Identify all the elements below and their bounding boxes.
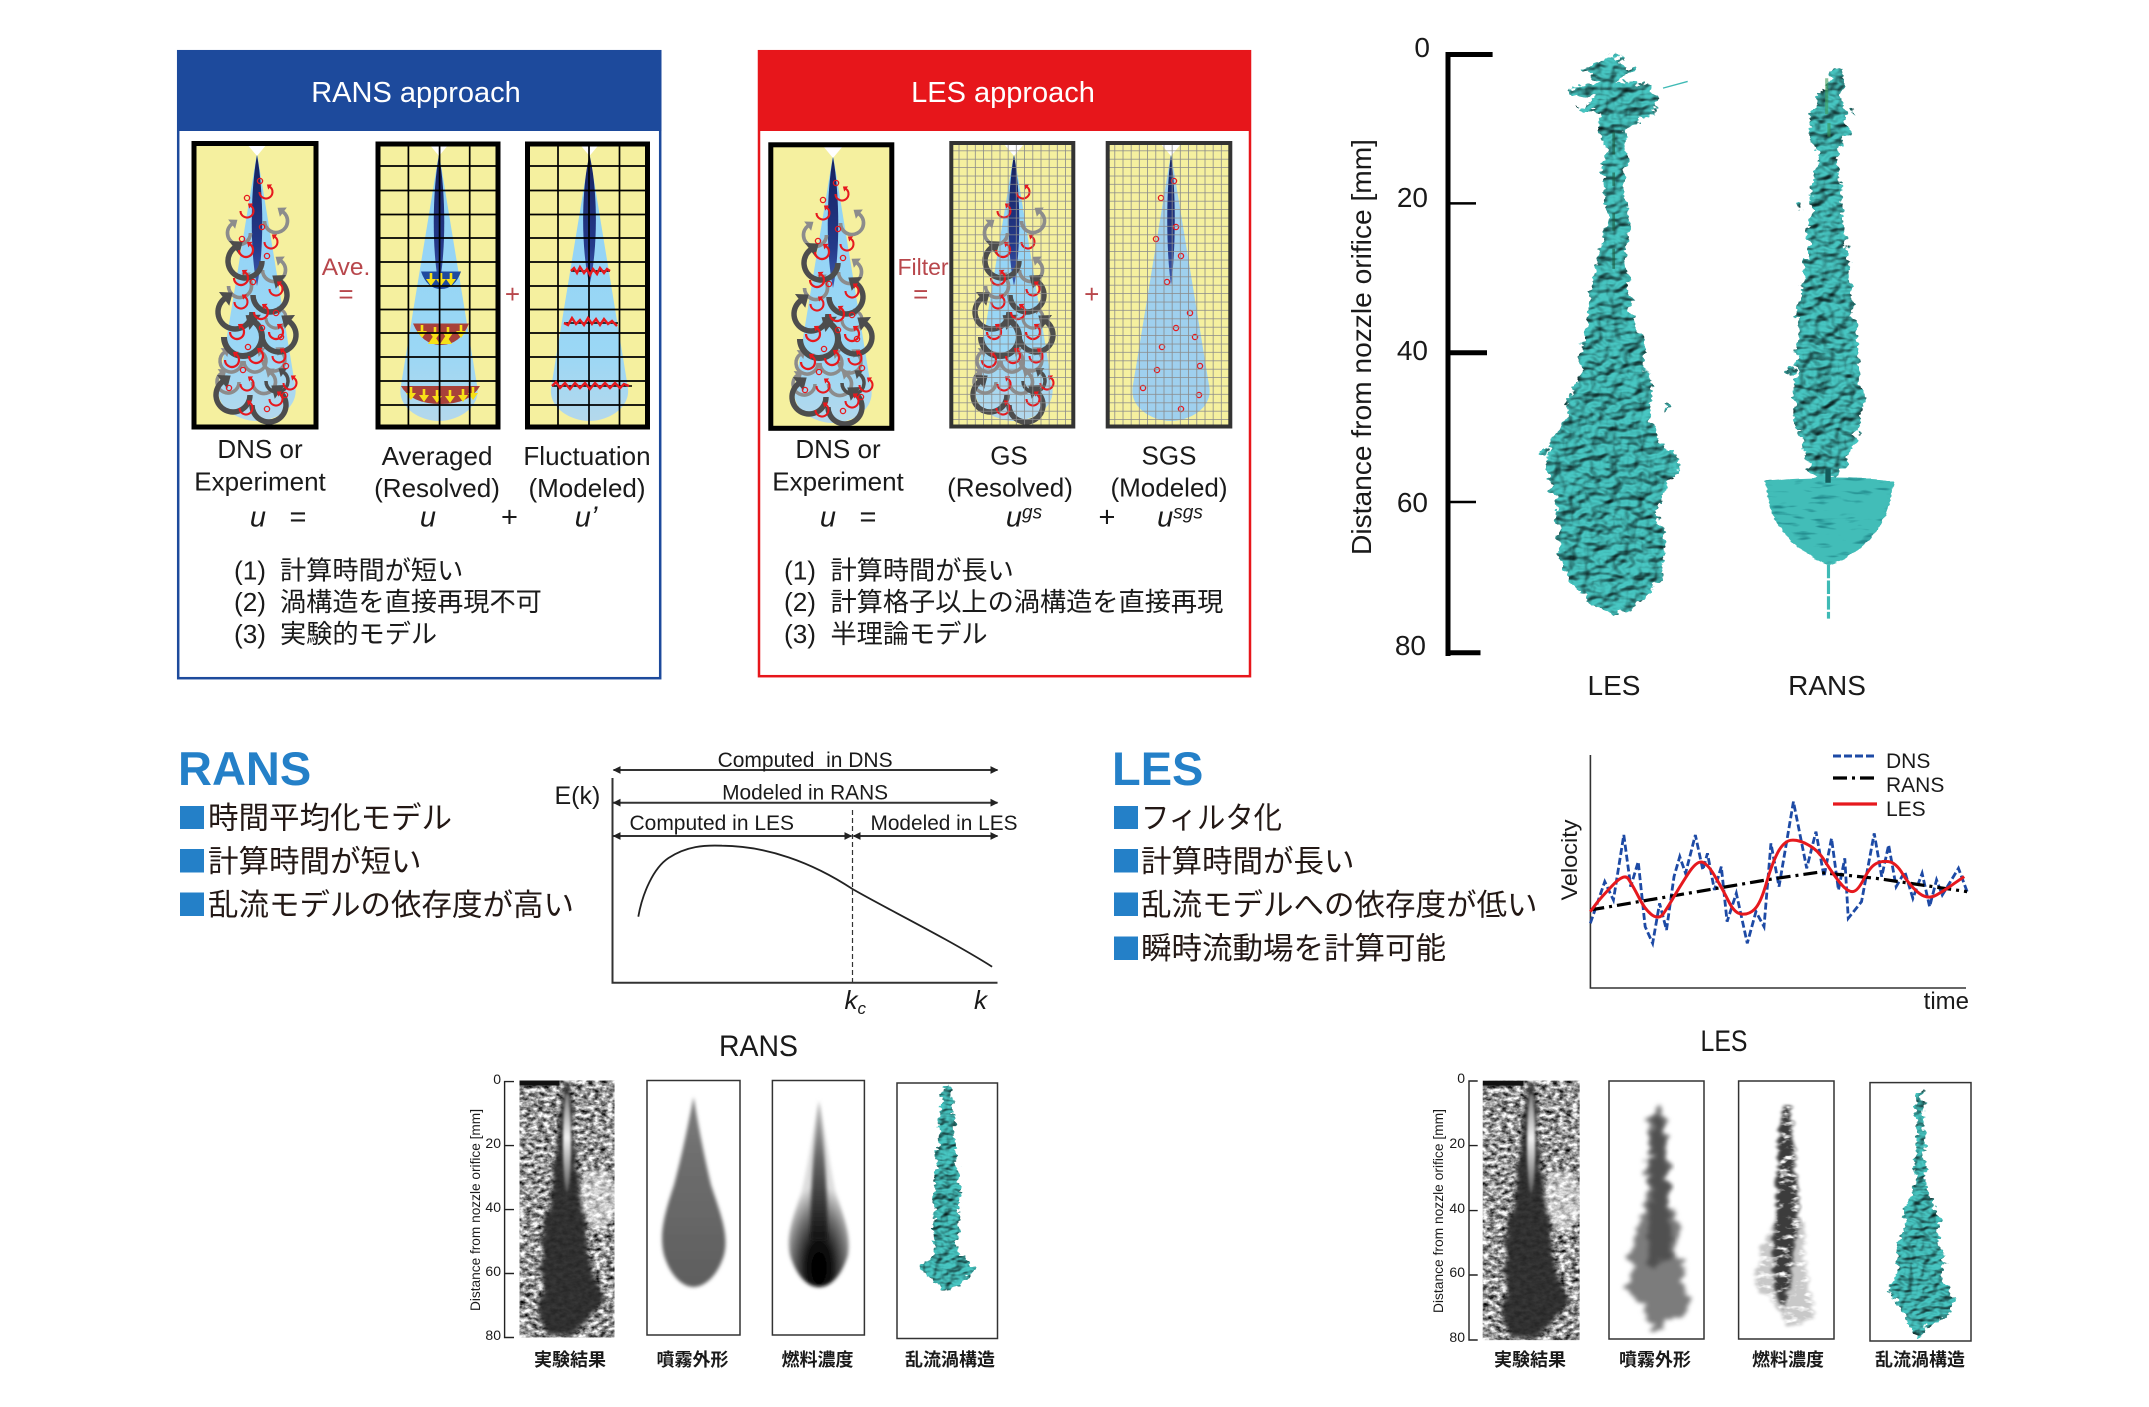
list: LES features: 計算時間が長い [1141,845,1354,879]
list: RANS features [180,802,574,922]
legend: RANS [1886,774,1944,797]
labels: component captions: (Resolved) [947,472,1073,502]
equation: u = u + u': u’ [575,502,598,534]
image: experimental result [520,1080,616,1338]
equation: u = u + u': u [250,502,266,534]
image: turbulent structure [897,1083,998,1338]
chart: velocity over time [1557,750,1969,1015]
image: experimental result [1483,1081,1581,1340]
labels: component captions: Fluctuation [523,441,651,471]
text: RANS characteristics: 実験的モデル [280,619,437,649]
captions: 燃料濃度 [782,1350,854,1370]
chart: energy spectrum E(k): Computed in LES [630,812,794,835]
equation: u = ugs + usgs: gs [1022,502,1043,524]
axis: distance scale: Distance from nozzle orifice [mm] [1431,1109,1446,1313]
image: spray outline [647,1080,740,1335]
equation: u = ugs + usgs: = [860,502,876,534]
chart: energy spectrum E(k): Computed in DNS [718,749,893,772]
label: LES: LES [1588,670,1640,701]
panel: RANS approach [177,50,662,678]
text: RANS characteristics [234,556,542,649]
chart: velocity over time: Velocity [1557,820,1582,900]
label: RANS: RANS [1788,670,1866,701]
list: RANS features: 時間平均化モデル [208,802,452,836]
labels: component captions: Averaged [382,441,492,471]
chart: energy spectrum E(k): k [974,985,989,1015]
figure: LES turbulent structure [1542,54,1688,616]
diagram: SGS modeled field [1108,143,1230,426]
equation: u = ugs + usgs: + [1099,502,1115,534]
axis: distance scale: 40 [485,1199,501,1215]
diagram: DNS or experiment spray [771,145,892,428]
heading: RANS: RANS [178,742,311,795]
text: LES characteristics: (2) [784,587,816,617]
scale axis: distance from nozzle orifice: Distance from nozzle orifice [mm] [1346,139,1377,555]
labels: equals and plus signs: + [505,279,520,309]
image: spray outline [1609,1081,1704,1339]
labels: filter equals and plus signs: = [913,279,928,309]
heading: LES approach [758,50,1251,131]
legend [1833,750,1944,821]
scale axis: distance from nozzle orifice: 60 [1397,487,1428,518]
labels: component captions: Experiment [772,466,905,496]
diagram: fluctuation modeled field [527,144,648,428]
chart: energy spectrum E(k) [554,749,1018,1018]
captions: 噴霧外形 [656,1350,728,1370]
labels: component captions: (Resolved) [374,473,500,503]
text: LES characteristics: (3) [784,619,816,649]
text: RANS characteristics: 計算時間が短い [280,556,463,586]
axis: distance scale: 80 [1449,1329,1465,1345]
title: RANS: RANS [719,1030,798,1063]
axis: distance scale: 80 [485,1327,501,1343]
equation: u = ugs + usgs: u [1157,502,1173,534]
equation: u = u + u' [250,502,598,534]
chart: energy spectrum E(k): Modeled in RANS [722,782,888,804]
chart: energy spectrum E(k): k [844,985,858,1015]
equation: u = ugs + usgs: u [1006,502,1022,534]
text: LES characteristics: (1) [784,556,816,586]
image: turbulent structure [1870,1083,1971,1341]
section: RANS summary [178,742,574,922]
chart: energy spectrum E(k): E(k) [554,782,600,810]
labels: component captions: SGS [1142,440,1196,470]
labels: equals and plus signs: = [338,279,354,309]
equation: u = u + u': + [501,502,518,534]
labels: filter equals and plus signs: Filter [897,254,949,280]
labels: component captions [194,434,651,503]
diagram: averaged resolved field [378,144,498,428]
text: LES characteristics: 計算格子以上の渦構造を直接再現 [830,587,1223,617]
scale axis: distance from nozzle orifice [1346,32,1493,661]
scale axis: distance from nozzle orifice: 80 [1395,630,1426,661]
legend: LES [1886,798,1926,821]
labels: filter equals and plus signs: + [1084,279,1099,309]
labels: equals and plus signs [322,254,520,309]
scale axis: distance from nozzle orifice: 40 [1397,335,1428,366]
text: RANS characteristics: 渦構造を直接再現不可 [280,587,542,617]
axis: distance scale: Distance from nozzle orifice [mm] [468,1109,483,1311]
captions: 燃料濃度 [1752,1350,1824,1370]
equation: u = ugs + usgs [820,502,1203,534]
list: RANS features: 計算時間が短い [208,845,422,879]
heading: LES: LES [1112,742,1203,795]
legend: DNS [1886,750,1930,773]
axis: distance scale: 60 [485,1263,501,1279]
text: LES characteristics: 計算時間が長い [830,556,1014,586]
labels: component captions: (Modeled) [1110,472,1228,502]
list: LES features: 瞬時流動場を計算可能 [1141,932,1446,966]
labels: component captions: DNS or [217,434,303,464]
labels: component captions: Experiment [194,466,327,496]
labels: component captions: (Modeled) [528,473,646,503]
list: LES features: フィルタ化 [1141,802,1282,836]
labels: component captions: GS [990,440,1028,470]
equation: u = u + u': = [290,502,306,534]
axis: distance scale: 20 [1449,1135,1465,1151]
text: RANS characteristics: (3) [234,619,266,649]
chart: energy spectrum E(k): c [858,999,866,1018]
section: LES result images [1431,1025,1971,1370]
labels: component captions [772,434,1228,502]
captions: 乱流渦構造 [905,1350,995,1370]
heading: RANS approach [177,50,662,131]
image: fuel concentration [772,1080,864,1335]
axis: distance scale [468,1071,514,1343]
panel: large eddy structure comparison [1346,32,1894,701]
captions: 実験結果 [1494,1350,1566,1370]
axis: distance scale: 0 [493,1071,501,1087]
chart: velocity over time: time [1924,988,1969,1015]
figure: RANS turbulent structure [1765,67,1894,619]
section: RANS result images [468,1030,998,1370]
list: LES features: 乱流モデルへの依存度が低い [1141,888,1538,922]
labels: filter equals and plus signs [897,254,1099,309]
panel: LES approach [758,50,1251,676]
axis: distance scale: 0 [1457,1070,1465,1086]
scale axis: distance from nozzle orifice: 0 [1414,32,1430,63]
heading: RANS approach: RANS approach [311,77,521,109]
equation: u = u + u': u [420,502,436,534]
chart: energy spectrum E(k): Modeled in LES [870,812,1018,835]
diagram: DNS or experiment spray [194,144,316,427]
captions: 乱流渦構造 [1875,1350,1965,1370]
labels: equals and plus signs: Ave. [322,254,370,281]
captions [1494,1350,1965,1370]
section: LES summary [1112,742,1538,966]
axis: distance scale: 60 [1449,1264,1465,1280]
equation: u = ugs + usgs: u [820,502,836,534]
captions: 実験結果 [534,1350,606,1370]
captions [534,1350,995,1370]
list: RANS features: 乱流モデルの依存度が高い [208,888,574,922]
title: LES: LES [1700,1025,1748,1058]
list: LES features [1114,802,1538,966]
text: LES characteristics: 半理論モデル [830,619,988,649]
axis: distance scale: 40 [1449,1200,1465,1216]
text: LES characteristics [784,556,1223,649]
captions: 噴霧外形 [1619,1350,1691,1370]
scale axis: distance from nozzle orifice: 20 [1397,182,1428,213]
equation: u = ugs + usgs: sgs [1173,502,1203,524]
diagram: GS resolved field [951,143,1073,426]
labels: component captions: DNS or [795,434,881,464]
axis: distance scale: 20 [485,1135,501,1151]
heading: LES approach: LES approach [911,77,1095,109]
text: RANS characteristics: (2) [234,587,266,617]
axis: distance scale [1431,1070,1478,1345]
image: fuel concentration [1739,1081,1834,1339]
text: RANS characteristics: (1) [234,556,266,586]
